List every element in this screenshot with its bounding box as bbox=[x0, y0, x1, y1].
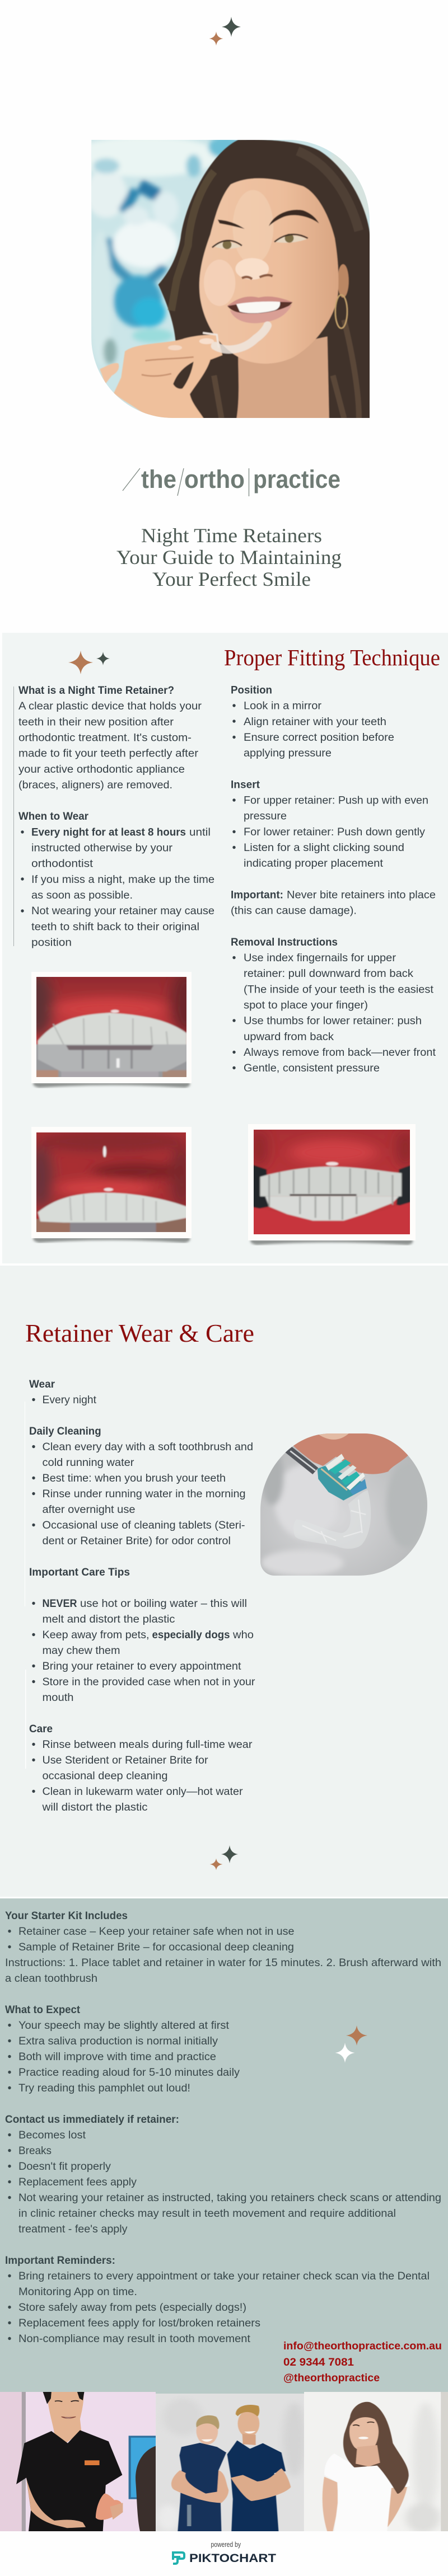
text block: what to expect: What to Expect bbox=[5, 2004, 81, 2016]
text block: wear, cleaning and care tips: melt and distort the plastic bbox=[43, 1614, 175, 1625]
text block: what to expect: Try reading this pamphlet out loud! bbox=[18, 2083, 190, 2094]
text block: contact us immediately: treatment - fee's apply bbox=[18, 2224, 128, 2235]
text block: wear, cleaning and care tips: Bring your retainer to every appointment bbox=[43, 1661, 241, 1672]
contact details bbox=[283, 2340, 442, 2384]
text block: contact us immediately: Replacement fees apply bbox=[18, 2177, 137, 2188]
photo: retainers on both arches bbox=[248, 1124, 416, 1245]
panel: proper fitting technique bbox=[2, 633, 448, 1263]
text block: fitting instructions: Important: bbox=[231, 890, 283, 901]
text block: fitting instructions: For upper retainer: Push up with even bbox=[244, 795, 428, 807]
text block: wear, cleaning and care tips: Best time: when you brush your teeth bbox=[43, 1473, 226, 1484]
text block: wear, cleaning and care tips: Store in the provided case when not in your bbox=[43, 1676, 255, 1688]
photo: retainer on upper teeth model bbox=[31, 972, 192, 1088]
text block: fitting instructions: Gentle, consistent pressure bbox=[244, 1063, 380, 1074]
text block: contact us immediately: Doesn't fit properly bbox=[18, 2161, 111, 2173]
text block: important reminders: Bring retainers to every appointment or take your retainer check scan via the Dental bbox=[18, 2271, 430, 2282]
text block: what to expect: Practice reading aloud for 5-10 minutes daily bbox=[18, 2067, 240, 2079]
text block: contact us immediately: Breaks bbox=[18, 2145, 52, 2157]
photo: two orthodontists in navy scrubs bbox=[156, 2394, 306, 2532]
text block: what is a retainer and when to wear: your active orthodontic appliance bbox=[18, 764, 185, 775]
text block: what is a retainer and when to wear bbox=[13, 685, 214, 948]
text block: starter kit: Retainer case – Keep your retainer safe when not in use bbox=[18, 1926, 295, 1938]
panel: starter kit, expectations and reminders bbox=[0, 1898, 448, 2394]
heading: proper fitting technique: Proper Fitting Technique bbox=[224, 645, 440, 670]
text block: wear, cleaning and care tips: occasional deep cleaning bbox=[43, 1770, 168, 1782]
text block: wear, cleaning and care tips: Keep away from pets, bbox=[43, 1629, 149, 1641]
text block: wear, cleaning and care tips: will distort the plastic bbox=[41, 1802, 148, 1813]
text block: what is a retainer and when to wear: as soon as possible. bbox=[31, 890, 133, 901]
text block: starter kit: a clean toothbrush bbox=[5, 1973, 97, 1985]
text block: what is a retainer and when to wear: teeth in their new position after bbox=[18, 716, 174, 728]
text block: wear, cleaning and care tips: Occasional use of cleaning tablets (Steri- bbox=[43, 1520, 245, 1531]
text block: wear, cleaning and care tips: especially dogs bbox=[152, 1629, 230, 1641]
text block: contact us immediately bbox=[5, 2114, 441, 2235]
text block: what is a retainer and when to wear: orthodontist bbox=[31, 858, 94, 870]
text block: fitting instructions: pressure bbox=[244, 811, 287, 822]
photo: team member with long brown hair in white t-shirt bbox=[304, 2392, 448, 2533]
text block: fitting instructions: retainer: pull downward from back bbox=[244, 968, 414, 980]
text block: wear, cleaning and care tips: Use Sterident or Retainer Brite for bbox=[43, 1755, 208, 1766]
icon: section sparkles bbox=[68, 651, 110, 674]
contact details: @theorthopractice bbox=[283, 2372, 380, 2384]
logo: the/ortho|practice: practice bbox=[253, 465, 340, 493]
text block: what is a retainer and when to wear: orthodontic treatment. It's custom- bbox=[18, 732, 192, 744]
title bbox=[116, 524, 342, 590]
text block: wear, cleaning and care tips: Daily Cleaning bbox=[29, 1426, 101, 1437]
text block: starter kit: Instructions: 1. Place tablet and retainer in water for 15 minutes. 2. Brush afterward with bbox=[5, 1957, 441, 1969]
text block: what is a retainer and when to wear: instructed otherwise by your bbox=[31, 843, 173, 854]
text block: wear, cleaning and care tips: Rinse between meals during full-time wear bbox=[43, 1739, 253, 1751]
text block: fitting instructions bbox=[231, 685, 436, 1074]
text block: wear, cleaning and care tips: cold running water bbox=[43, 1457, 134, 1469]
text block: fitting instructions: Ensure correct position before bbox=[244, 732, 394, 744]
text block: wear, cleaning and care tips: dent or Retainer Brite) for odor control bbox=[43, 1535, 231, 1547]
title: Your Perfect Smile bbox=[152, 568, 311, 590]
text block: important reminders: Replacement fees apply for lost/broken retainers bbox=[18, 2318, 260, 2329]
text block: what is a retainer and when to wear: (braces, aligners) are removed. bbox=[18, 779, 172, 791]
text block: what to expect bbox=[5, 2004, 240, 2094]
text block: starter kit bbox=[5, 1910, 441, 1985]
text block: fitting instructions: (this can cause damage). bbox=[231, 905, 357, 917]
heading: retainer wear and care: Retainer Wear & Care bbox=[25, 1319, 254, 1347]
text block: wear, cleaning and care tips: Important Care Tips bbox=[29, 1567, 130, 1578]
text block: what is a retainer and when to wear: If you miss a night, make up the time bbox=[31, 874, 214, 886]
text block: fitting instructions: Use thumbs for lower retainer: push bbox=[244, 1016, 422, 1027]
text block: important reminders: Important Reminders: bbox=[5, 2255, 115, 2267]
logo: the/ortho|practice bbox=[123, 465, 340, 496]
text block: what is a retainer and when to wear: position bbox=[31, 937, 72, 948]
text block: fitting instructions: Listen for a slight clicking sound bbox=[244, 842, 404, 854]
text block: wear, cleaning and care tips: NEVER bbox=[43, 1598, 77, 1610]
text block: wear, cleaning and care tips: use hot or boiling water – this will bbox=[80, 1598, 247, 1610]
logo: the/ortho|practice: ortho bbox=[184, 465, 245, 493]
text block: contact us immediately: in clinic retainer checks may result in teeth movement and require additional bbox=[18, 2208, 396, 2220]
text block: what to expect: Both will improve with time and practice bbox=[18, 2051, 216, 2063]
text block: wear, cleaning and care tips: Every night bbox=[43, 1394, 97, 1406]
photo: orthodontist in black scrubs holding a teeth model bbox=[0, 2392, 156, 2532]
text block: fitting instructions: Removal Instructions bbox=[231, 937, 338, 948]
text block: fitting instructions: spot to place your finger) bbox=[244, 999, 368, 1012]
text block: fitting instructions: For lower retainer: Push down gently bbox=[244, 826, 426, 838]
text block: fitting instructions: Always remove from back—never front bbox=[244, 1047, 436, 1059]
text block: fitting instructions: Never bite retainers into place bbox=[287, 890, 436, 901]
text block: what is a retainer and when to wear: What is a Night Time Retainer? bbox=[18, 685, 174, 697]
hero photo: woman holding clear retainer bbox=[91, 140, 370, 418]
text block: fitting instructions: Use index fingernails for upper bbox=[244, 952, 396, 964]
text block: what to expect: Your speech may be slightly altered at first bbox=[18, 2020, 230, 2032]
text block: what is a retainer and when to wear: Every night for at least 8 hours bbox=[31, 826, 186, 838]
text block: what is a retainer and when to wear: until bbox=[189, 826, 211, 838]
text block: wear, cleaning and care tips: mouth bbox=[43, 1692, 74, 1704]
text block: fitting instructions: Position bbox=[231, 685, 272, 696]
icon: piktochart logo mark bbox=[173, 2553, 184, 2564]
text block: fitting instructions: (The inside of your teeth is the easiest bbox=[244, 984, 434, 995]
text block: starter kit: Sample of Retainer Brite – for occasional deep cleaning bbox=[18, 1942, 294, 1953]
photo: toothbrush cleaning a clear retainer bbox=[258, 1431, 431, 1578]
contact details: info@theorthopractice.com.au bbox=[283, 2340, 442, 2352]
text block: what is a retainer and when to wear: When to Wear bbox=[18, 811, 89, 822]
text block: fitting instructions: applying pressure bbox=[244, 748, 332, 759]
text block: wear, cleaning and care tips: may chew them bbox=[43, 1645, 120, 1657]
text block: fitting instructions: Align retainer with your teeth bbox=[244, 716, 386, 728]
text block: wear, cleaning and care tips: after overnight use bbox=[43, 1504, 136, 1516]
text block: important reminders: Store safely away from pets (especially dogs!) bbox=[18, 2302, 246, 2314]
text block: wear, cleaning and care tips: Care bbox=[29, 1723, 53, 1735]
photo: retainer seated on upper teeth model bbox=[29, 1127, 193, 1243]
icon: sparkles on sage panel bbox=[335, 2025, 367, 2063]
text block: what to expect: Extra saliva production is normal initially bbox=[18, 2036, 218, 2047]
title: Your Guide to Maintaining bbox=[116, 546, 342, 568]
text block: what is a retainer and when to wear: Not wearing your retainer may cause bbox=[31, 905, 214, 917]
footer: powered by piktochart: powered by bbox=[211, 2540, 241, 2549]
icon: top sparkles bbox=[209, 17, 241, 46]
icon: lower sparkles bbox=[209, 1845, 238, 1870]
text block: wear, cleaning and care tips: Clean every day with a soft toothbrush and bbox=[43, 1441, 253, 1453]
text block: wear, cleaning and care tips: Clean in lukewarm water only—hot water bbox=[43, 1786, 243, 1798]
footer: powered by piktochart: PIKTOCHART bbox=[189, 2552, 276, 2565]
text block: important reminders: Monitoring App on time. bbox=[18, 2286, 137, 2298]
text block: what is a retainer and when to wear: A clear plastic device that holds your bbox=[18, 701, 202, 712]
text block: wear, cleaning and care tips: who bbox=[232, 1629, 254, 1641]
text block: important reminders bbox=[5, 2255, 430, 2345]
text block: contact us immediately: Not wearing your retainer as instructed, taking you retainers check scans or attending bbox=[18, 2192, 441, 2204]
text block: what is a retainer and when to wear: made to fit your teeth perfectly after bbox=[18, 748, 199, 760]
panel: retainer wear and care bbox=[0, 1266, 448, 1897]
text block: fitting instructions: Insert bbox=[231, 779, 260, 791]
text block: wear, cleaning and care tips bbox=[29, 1379, 255, 1813]
text block: fitting instructions: upward from back bbox=[244, 1031, 334, 1043]
text block: fitting instructions: indicating proper placement bbox=[244, 858, 384, 869]
contact details: 02 9344 7081 bbox=[283, 2357, 354, 2368]
footer: powered by piktochart bbox=[173, 2540, 276, 2565]
text block: wear, cleaning and care tips: Wear bbox=[29, 1379, 55, 1390]
text block: what is a retainer and when to wear: teeth to shift back to their original bbox=[31, 921, 199, 933]
logo: the/ortho|practice: the bbox=[141, 465, 176, 493]
text block: fitting instructions: Look in a mirror bbox=[244, 701, 322, 712]
text block: starter kit: Your Starter Kit Includes bbox=[5, 1910, 128, 1922]
text block: contact us immediately: Contact us immediately if retainer: bbox=[5, 2114, 179, 2126]
text block: contact us immediately: Becomes lost bbox=[18, 2130, 86, 2141]
text block: wear, cleaning and care tips: Rinse under running water in the morning bbox=[43, 1488, 245, 1500]
title: Night Time Retainers bbox=[141, 524, 322, 547]
text block: important reminders: Non-compliance may result in tooth movement bbox=[18, 2333, 251, 2345]
